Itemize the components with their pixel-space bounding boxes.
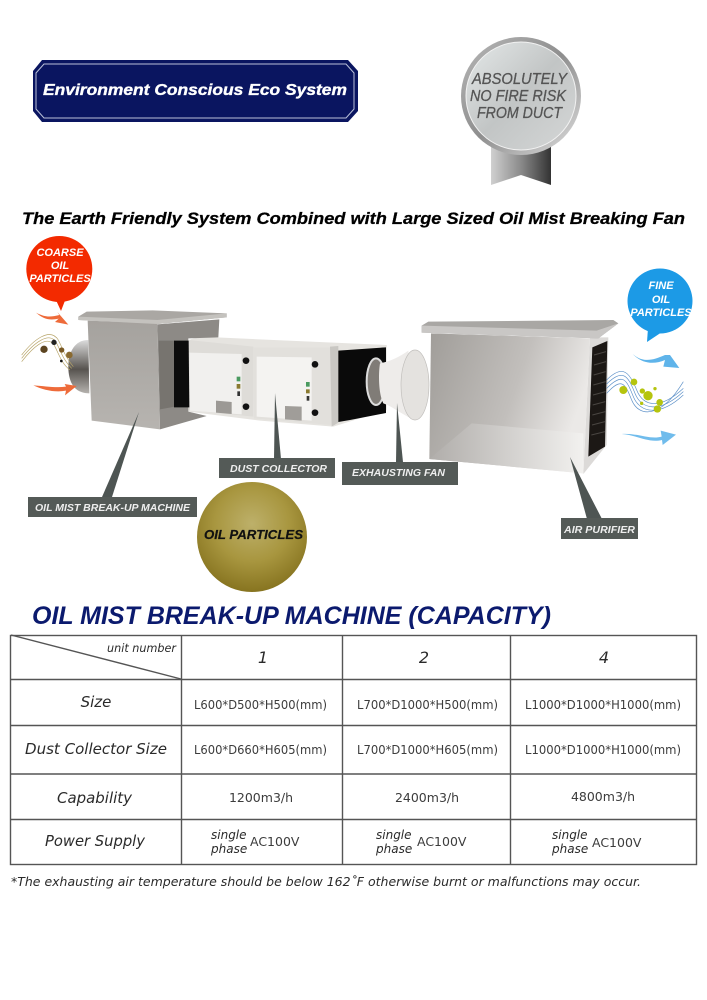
label: exhausting fan: EXHAUSTING FAN — [352, 467, 445, 479]
left box — [78, 310, 227, 429]
callout: coarse oil particles: COARSE — [36, 247, 84, 259]
callout: fine oil particles: PARTICLES — [630, 307, 692, 319]
table header: 4 — [599, 648, 609, 667]
badge: absolutely no fire risk from duct: ABSOLUTELY — [471, 71, 568, 88]
row: power supply: AC100V — [250, 834, 300, 849]
callout: coarse oil particles: PARTICLES — [29, 273, 91, 285]
row: power supply: AC100V — [592, 835, 642, 850]
badge: absolutely no fire risk from duct — [461, 37, 581, 185]
cylinder inlet — [68, 340, 89, 393]
footnote: *The exhausting air temperature should be below 162˚F otherwise burnt or malfunctions may occur. — [11, 874, 641, 889]
callout: fine oil particles: OIL — [652, 294, 670, 306]
row: power supply — [45, 828, 642, 856]
pointer: air purifier — [570, 457, 602, 519]
row: power supply: phase — [375, 842, 412, 856]
gold sphere: oil particles: OIL PARTICLES — [204, 527, 303, 542]
label: air purifier: AIR PURIFIER — [563, 524, 635, 536]
row: capability: 4800m3/h — [571, 789, 635, 804]
callout: coarse oil particles: OIL — [51, 260, 69, 272]
row: power supply: single — [552, 828, 588, 842]
machine diagram: exhausting fan and air purifier — [367, 320, 683, 474]
row: power supply: single — [376, 828, 412, 842]
pointer: dust collector — [274, 393, 281, 459]
badge: absolutely no fire risk from duct: NO FIRE RISK — [470, 88, 567, 105]
section title: OIL MIST BREAK-UP MACHINE (CAPACITY) — [32, 602, 551, 630]
callout: fine oil particles — [628, 268, 692, 342]
row: size — [81, 693, 681, 712]
table header — [107, 641, 609, 667]
gold sphere: oil particles — [197, 482, 307, 592]
air purifier box — [422, 320, 618, 474]
label: oil mist break-up machine: OIL MIST BREAK-UP MACHINE — [35, 502, 191, 514]
pointer: exhausting fan — [396, 403, 403, 462]
row: dust collector size — [25, 740, 681, 758]
table header: 1 — [258, 648, 268, 667]
badge: absolutely no fire risk from duct: FROM DUCT — [477, 105, 563, 122]
row: size: Size — [81, 693, 111, 711]
label: exhausting fan — [342, 462, 458, 485]
dust collector body — [188, 337, 387, 427]
label: dust collector — [219, 458, 335, 478]
callout: fine oil particles: FINE — [648, 280, 674, 292]
row: dust collector size: L700*D1000*H605(mm) — [357, 742, 498, 757]
table header: 2 — [419, 648, 429, 667]
pointer: oil mist — [102, 412, 139, 497]
row: capability: 2400m3/h — [395, 790, 459, 805]
row: capability: 1200m3/h — [229, 790, 293, 805]
subtitle: The Earth Friendly System Combined with Large Sized Oil Mist Breaking Fan — [22, 210, 685, 228]
row: size: L1000*D1000*H1000(mm) — [525, 697, 681, 712]
banner: Environment Conscious Eco System: Environment Conscious Eco System — [43, 82, 347, 99]
table header: unit number — [107, 641, 177, 655]
row: size: L700*D1000*H500(mm) — [357, 697, 498, 712]
arrows: coarse flow — [33, 312, 77, 395]
exhausting fan — [367, 350, 429, 420]
label: dust collector: DUST COLLECTOR — [230, 463, 327, 475]
row: power supply: AC100V — [417, 834, 467, 849]
row: dust collector size: Dust Collector Size — [25, 740, 167, 758]
arrows: fine flow — [622, 354, 679, 445]
capacity table — [10, 635, 697, 864]
row: power supply: single — [211, 828, 247, 842]
row: dust collector size: L600*D660*H605(mm) — [194, 742, 327, 757]
row: power supply: phase — [551, 842, 588, 856]
label: air purifier — [561, 518, 638, 539]
machine diagram: break-up machine and dust collector — [22, 310, 387, 429]
oil stream particles — [22, 335, 73, 370]
row: capability: Capability — [57, 789, 133, 807]
row: capability — [57, 789, 635, 807]
row: power supply: phase — [210, 842, 247, 856]
row: dust collector size: L1000*D1000*H1000(mm) — [525, 742, 681, 757]
row: power supply: Power Supply — [45, 832, 146, 850]
clean air stream particles — [607, 371, 683, 413]
callout: coarse oil particles — [26, 236, 92, 311]
banner: Environment Conscious Eco System — [33, 60, 358, 122]
row: size: L600*D500*H500(mm) — [194, 697, 327, 712]
label: oil mist break-up machine — [28, 497, 197, 517]
